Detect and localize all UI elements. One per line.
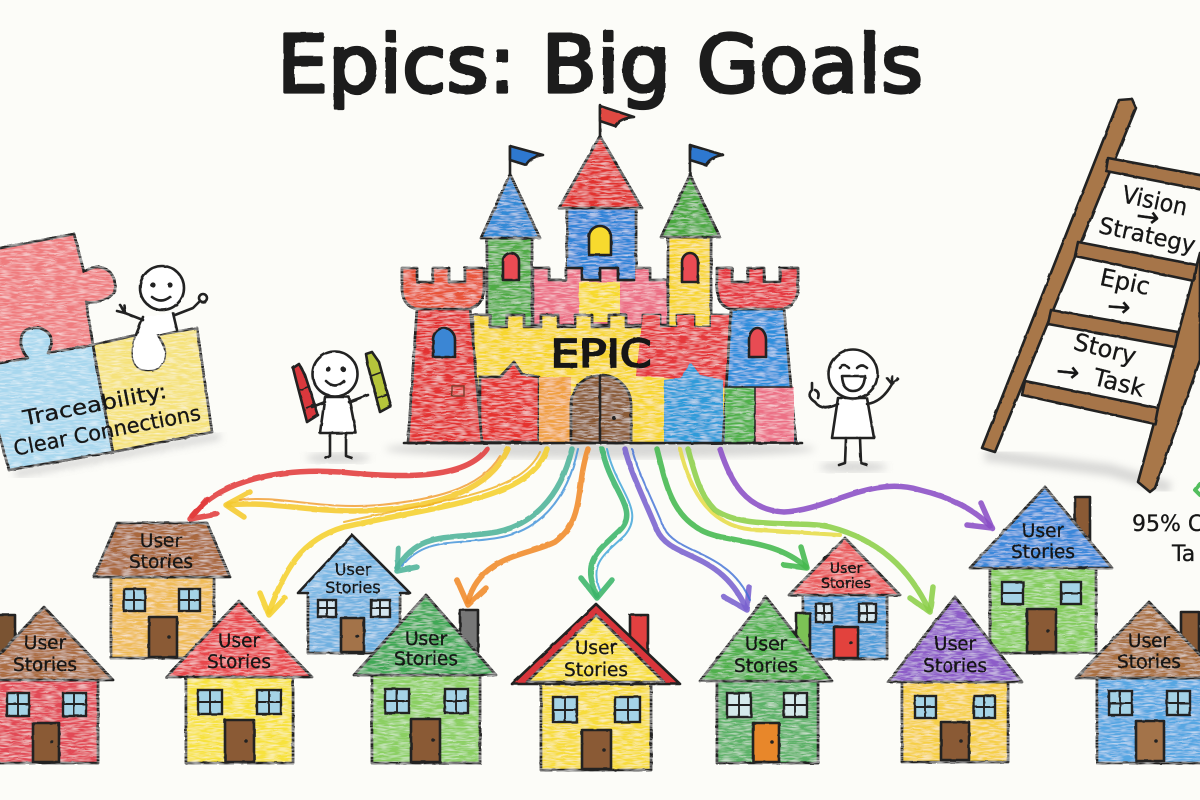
arrow: red to left house xyxy=(190,449,487,519)
main wall xyxy=(473,315,730,443)
right tower xyxy=(717,268,798,443)
left tower xyxy=(402,268,484,443)
house: brown roof right: User xyxy=(1128,631,1170,652)
house: purple roof: User xyxy=(934,634,976,655)
house: brown roof right: Stories xyxy=(1117,652,1181,673)
arrow: yellow to left house xyxy=(226,449,508,517)
house: blue small: User xyxy=(335,560,372,579)
puzzle figure xyxy=(117,266,207,370)
figure body xyxy=(312,352,368,458)
house: red roof small: User xyxy=(829,561,863,577)
castle ground shadow xyxy=(385,440,815,458)
house: blue small: Stories xyxy=(325,578,381,597)
house: blue roof big: User xyxy=(1022,521,1064,542)
clipped metric text xyxy=(1132,512,1200,567)
arrow: green to yellow house xyxy=(581,449,632,598)
figure body xyxy=(810,350,898,465)
arrow: orange to green house xyxy=(457,449,588,605)
ladder xyxy=(982,99,1200,492)
ladder text: task: Task xyxy=(1090,363,1148,403)
house: brown roof left: User xyxy=(24,633,66,654)
stick figure with crayons xyxy=(293,352,391,463)
red crayon xyxy=(293,364,318,422)
ladder arrow 2: → xyxy=(1106,289,1132,324)
arrow: purple to blue house xyxy=(720,449,992,528)
castle xyxy=(402,105,802,443)
castle ground line xyxy=(404,442,802,444)
house: green roof centre right: User xyxy=(745,634,787,655)
house: red roof: Stories xyxy=(207,652,271,673)
house: brown roof top left xyxy=(94,523,230,658)
house: blue roof big xyxy=(970,487,1112,653)
ladder text: epic: Epic xyxy=(1098,263,1152,301)
house: blue small xyxy=(298,535,410,653)
puzzle shadow xyxy=(15,436,220,474)
green crayon xyxy=(366,352,391,412)
ladder arrow 1: → xyxy=(1134,199,1162,234)
centre tower xyxy=(559,105,642,290)
house: purple roof: Stories xyxy=(923,656,987,677)
green tower xyxy=(481,146,543,330)
house: purple roof xyxy=(888,597,1022,762)
arrow: yellow to red house xyxy=(260,449,547,615)
puzzle label xyxy=(6,373,203,461)
arrow: green to small house xyxy=(657,449,807,568)
house: green roof: Stories xyxy=(394,649,458,670)
puzzle traceability xyxy=(0,234,220,474)
yellow piece xyxy=(93,328,212,452)
stick figure cheering xyxy=(810,350,898,472)
ladder shadow xyxy=(985,455,1170,488)
house: yellow roof with red edge: User xyxy=(575,638,617,659)
yellow tower xyxy=(661,145,723,330)
rungs xyxy=(1022,158,1200,424)
arrow: lime to purple house xyxy=(680,449,933,612)
ladder text: story: Story xyxy=(1071,328,1139,370)
house: green roof centre right: Stories xyxy=(734,656,798,677)
house: green roof centre right xyxy=(700,597,832,763)
house: brown roof left: Stories xyxy=(13,655,77,676)
house: yellow roof with red edge: Stories xyxy=(564,660,628,681)
house: red roof: User xyxy=(218,631,260,652)
arrow: teal to blue house xyxy=(397,449,578,571)
title: Epics: Big Goals xyxy=(277,19,923,111)
figure shadow xyxy=(819,462,887,472)
house: blue roof big: Stories xyxy=(1011,542,1075,563)
ladder arrow 3: → xyxy=(1055,354,1081,389)
second line: Ta xyxy=(1171,542,1195,567)
EPIC label: EPIC xyxy=(550,332,652,376)
ladder text: vision: Vision xyxy=(1120,180,1190,222)
arrow: violet to green house xyxy=(625,449,750,610)
traceability text: Traceability: xyxy=(20,379,169,431)
right rail xyxy=(1138,253,1200,492)
house: red roof small xyxy=(789,538,900,659)
house: yellow roof with red edge xyxy=(512,604,680,770)
house: brown roof right xyxy=(1076,602,1200,763)
house: green roof: User xyxy=(405,629,447,650)
house: brown roof left xyxy=(0,607,113,763)
house: red roof small: Stories xyxy=(821,576,871,592)
left rail xyxy=(982,99,1136,452)
house: green roof xyxy=(354,595,496,763)
rear wall xyxy=(533,258,670,325)
figure shadow xyxy=(306,453,370,463)
arrow: green tip at edge xyxy=(1195,484,1200,495)
house: brown roof top left: Stories xyxy=(129,552,193,573)
red piece xyxy=(0,234,116,364)
house: red roof xyxy=(166,601,312,763)
connections text: Clear Connections xyxy=(12,401,203,461)
rainbow arrows xyxy=(190,449,1200,615)
blue piece xyxy=(0,328,113,470)
ladder text: strategy: Strategy xyxy=(1096,213,1198,259)
house: brown roof top left: User xyxy=(140,531,182,552)
